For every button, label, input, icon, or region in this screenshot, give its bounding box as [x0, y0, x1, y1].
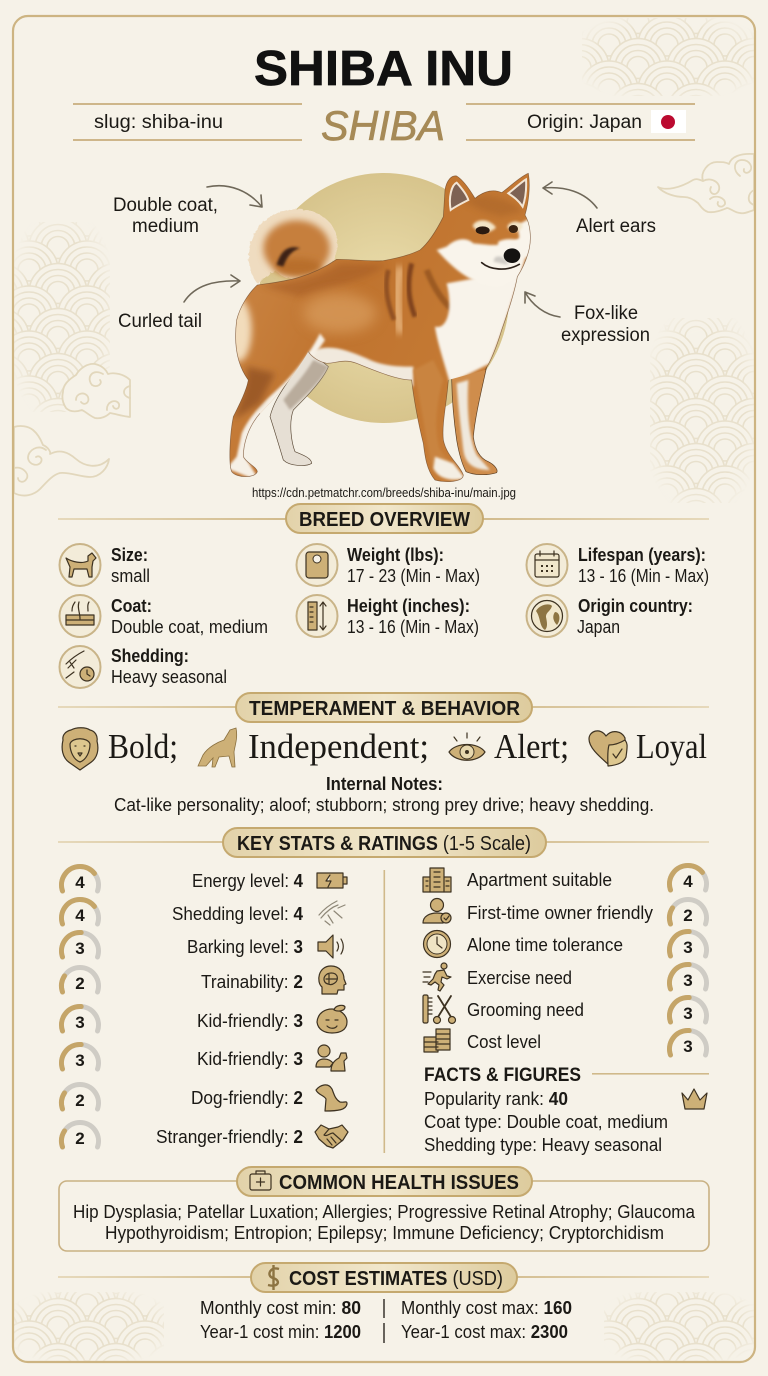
row: shedding level — [62, 900, 345, 925]
item: weight — [296, 544, 480, 586]
item: shedding: Shedding: — [111, 645, 189, 666]
arrow: double coat — [207, 186, 262, 207]
item: coat: Coat: — [111, 595, 152, 616]
header band — [73, 102, 695, 149]
row: trainability: 2 — [75, 974, 85, 993]
arrow: curled tail — [184, 275, 240, 302]
row: alone time tolerance: 3 — [683, 938, 693, 957]
text: loyal: Loyal — [636, 727, 707, 766]
item: shedding — [60, 645, 227, 688]
facts and figures — [424, 1065, 709, 1155]
item: height: Height (inches): — [347, 595, 470, 616]
heading: key stats: KEY STATS & RATINGS (1-5 Scale) — [237, 832, 531, 855]
row: first-time owner friendly — [423, 898, 706, 925]
heading: cost — [251, 1263, 517, 1292]
label: double coat — [113, 195, 218, 237]
row: exercise need — [423, 963, 706, 991]
row: stranger-friendly — [62, 1122, 348, 1148]
row: shedding level: 4 — [75, 906, 85, 925]
item: size: small — [111, 565, 150, 586]
panel: key stats and ratings — [58, 828, 709, 1155]
row: energy level — [62, 866, 347, 892]
item: height: 13 - 16 (Min - Max) — [347, 616, 479, 637]
panel: common health issues — [59, 1167, 709, 1251]
row: barking level: 3 — [75, 939, 85, 958]
row: energy level: Energy level: 4 — [192, 870, 304, 891]
label: fox-like expression: expression — [561, 325, 650, 346]
health list — [73, 1201, 696, 1243]
row: cost level: 3 — [683, 1037, 693, 1056]
heading: health — [237, 1167, 532, 1196]
item: size — [60, 544, 150, 586]
row: dog-friendly: 2 — [75, 1091, 85, 1110]
item: coat: Double coat, medium — [111, 616, 268, 637]
row: kid-friendly with dog: 3 — [75, 1051, 85, 1070]
item: weight: 17 - 23 (Min - Max) — [347, 565, 480, 586]
facts and figures: Shedding type: Heavy seasonal — [424, 1134, 662, 1155]
slug: slug: shiba-inu — [94, 112, 223, 133]
arrow: alert ears — [543, 182, 597, 208]
row: stranger-friendly: 2 — [75, 1129, 85, 1148]
icon: crown — [682, 1089, 707, 1109]
row: dog-friendly: Dog-friendly: 2 — [191, 1087, 303, 1108]
row: alone time tolerance — [424, 930, 706, 958]
row: apartment suitable — [423, 866, 706, 892]
row: grooming need — [423, 995, 706, 1024]
item: origin country: Japan — [577, 616, 620, 637]
title: SHIBA INU — [254, 42, 513, 96]
panel: temperament and behavior — [58, 693, 709, 815]
internal notes: Cat-like personality; aloof; stubborn; strong prey drive; heavy shedding. — [114, 794, 654, 815]
row: cost level: Cost level — [467, 1031, 541, 1052]
row: exercise need: Exercise need — [467, 967, 572, 988]
icon: eye — [449, 733, 485, 760]
facts and figures: Popularity rank: 40 — [424, 1088, 568, 1109]
row: kid-friendly with dog — [62, 1044, 347, 1071]
gold sun disc — [259, 173, 509, 423]
row: first-time owner friendly: First-time owner friendly — [467, 902, 654, 923]
facts and figures: FACTS & FIGURES — [424, 1065, 581, 1086]
item: lifespan: 13 - 16 (Min - Max) — [578, 565, 709, 586]
row: barking level — [62, 932, 343, 958]
image source url: https://cdn.petmatchr.com/breeds/shiba-inu/main.jpg — [252, 486, 516, 500]
item: coat — [60, 595, 268, 637]
health list: Hypothyroidism; Entropion; Epilepsy; Immune Deficiency; Cryptorchidism — [105, 1222, 664, 1243]
internal notes — [114, 773, 654, 815]
row: stranger-friendly: Stranger-friendly: 2 — [156, 1126, 303, 1147]
label: double coat: Double coat, — [113, 195, 218, 216]
health list: Hip Dysplasia; Patellar Luxation; Allergies; Progressive Retinal Atrophy; Glaucoma — [73, 1201, 696, 1222]
row: shedding level: Shedding level: 4 — [172, 903, 304, 924]
row: kid-friendly: Kid-friendly: 3 — [197, 1010, 303, 1031]
heading: breed overview: BREED OVERVIEW — [299, 508, 471, 531]
row: kid-friendly with dog: Kid-friendly: 3 — [197, 1048, 303, 1069]
panel: breed overview — [58, 504, 709, 688]
cost values: Year-1 cost max: 2300 — [401, 1321, 568, 1342]
row: kid-friendly — [62, 1005, 347, 1033]
icon: japan flag — [651, 110, 686, 133]
internal notes: Internal Notes: — [326, 773, 443, 794]
row: exercise need: 3 — [683, 971, 693, 990]
label: alert ears: Alert ears — [576, 216, 656, 237]
item: shedding: Heavy seasonal — [111, 666, 227, 687]
item: origin country — [526, 595, 693, 637]
text: independent: Independent; — [248, 727, 429, 766]
item: weight: Weight (lbs): — [347, 544, 444, 565]
row: kid-friendly: 3 — [75, 1013, 85, 1032]
heading: health: COMMON HEALTH ISSUES — [279, 1171, 519, 1194]
row: grooming need: Grooming need — [467, 999, 584, 1020]
cost values: Year-1 cost min: 1200 — [200, 1321, 361, 1342]
cost values — [200, 1297, 572, 1343]
row: trainability: Trainability: 2 — [201, 971, 303, 992]
item: height — [296, 595, 479, 637]
row: energy level: 4 — [75, 873, 85, 892]
dog illustration — [225, 173, 533, 482]
decorative breed name: SHIBA — [321, 102, 445, 149]
facts and figures: Coat type: Double coat, medium — [424, 1111, 668, 1132]
text: bold: Bold; — [108, 727, 178, 766]
arrow: fox-like expression — [525, 292, 560, 317]
row: apartment suitable: Apartment suitable — [467, 869, 612, 890]
label: curled tail: Curled tail — [118, 311, 202, 332]
panel: cost estimates — [58, 1263, 709, 1343]
icon: wolf — [198, 728, 237, 767]
label: double coat: medium — [132, 216, 199, 237]
row: dog-friendly — [62, 1084, 347, 1111]
heading: cost: COST ESTIMATES (USD) — [289, 1267, 503, 1290]
icon: heart and shield — [589, 731, 627, 766]
text: alert: Alert; — [494, 727, 569, 766]
item: origin country: Origin country: — [578, 595, 693, 616]
item: lifespan: Lifespan (years): — [578, 544, 706, 565]
row: apartment suitable: 4 — [683, 872, 693, 891]
row: first-time owner friendly: 2 — [683, 906, 693, 925]
origin: Origin: Japan — [527, 112, 642, 133]
row: barking level: Barking level: 3 — [187, 936, 303, 957]
row: alone time tolerance: Alone time tolerance — [467, 934, 623, 955]
label: fox-like expression: Fox-like — [574, 303, 638, 324]
item: size: Size: — [111, 544, 148, 565]
item: lifespan — [526, 544, 709, 586]
icon: lion — [62, 728, 98, 770]
label: fox-like expression — [561, 303, 650, 346]
cost values: Monthly cost min: 80 — [200, 1297, 361, 1318]
heading: temperament: TEMPERAMENT & BEHAVIOR — [249, 697, 520, 720]
row: trainability — [62, 966, 346, 994]
cost values: Monthly cost max: 160 — [401, 1297, 572, 1318]
row: grooming need: 3 — [683, 1004, 693, 1023]
row: cost level — [424, 1029, 706, 1056]
